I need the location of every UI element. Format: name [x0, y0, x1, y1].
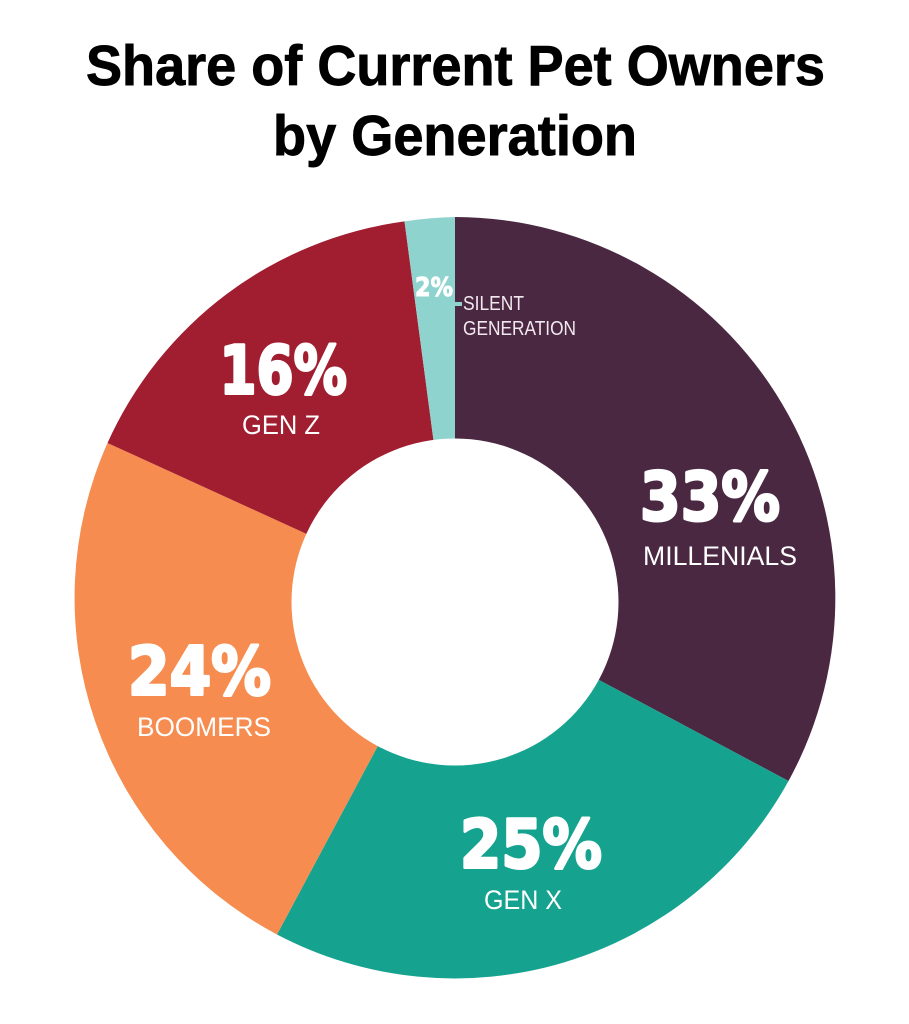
label: Gen Z: GEN Z — [242, 410, 320, 440]
label: Millennials: MILLENIALS — [643, 541, 797, 571]
label: Gen Z: 16% — [220, 332, 347, 410]
connector line — [455, 302, 462, 306]
segment: Boomers 24% — [75, 443, 455, 934]
donut chart — [75, 217, 835, 978]
label: Boomers: 24% — [128, 632, 271, 710]
title: Share of Current Pet Owners — [86, 34, 825, 98]
label: Silent Generation — [415, 273, 576, 340]
label: Boomers — [128, 632, 271, 742]
donut hole — [292, 438, 618, 766]
segment: Silent Generation 2% — [404, 217, 455, 598]
segment: Gen X 25% — [277, 598, 788, 978]
label: Silent Generation: GENERATION — [463, 318, 576, 340]
title — [86, 34, 825, 168]
label: Millennials: 33% — [640, 458, 780, 536]
label: Millennials — [640, 458, 797, 571]
label: Boomers: BOOMERS — [137, 712, 271, 742]
label: Silent Generation: SILENT — [463, 293, 524, 315]
label: Gen X: 25% — [460, 806, 602, 884]
label: Gen Z — [220, 332, 347, 440]
label: Silent Generation: 2% — [415, 273, 453, 303]
segment: Gen Z 16% — [108, 221, 455, 598]
segment: Millennials 33% — [455, 217, 835, 781]
title: by Generation — [273, 104, 637, 168]
label: Gen X: GEN X — [484, 885, 562, 915]
label: Gen X — [460, 806, 602, 915]
